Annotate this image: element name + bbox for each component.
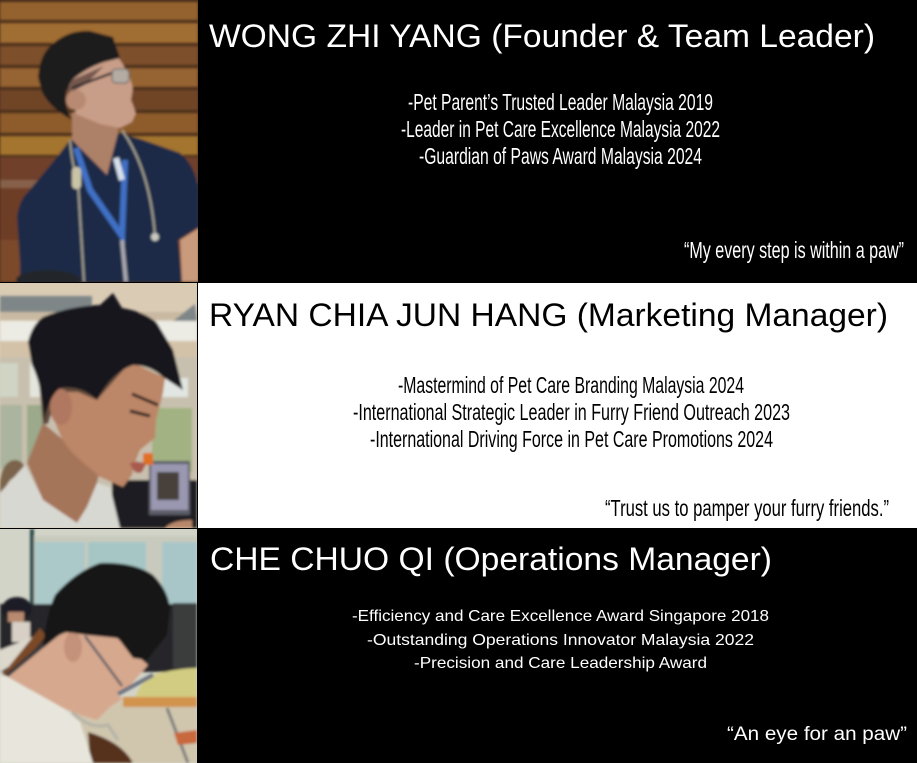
- shaved side: [67, 66, 104, 92]
- quote: “An eye for an paw”: [727, 724, 907, 745]
- chair strap: [2, 628, 46, 676]
- lanyard: [76, 148, 125, 236]
- lips: [130, 462, 146, 473]
- glasses: [85, 636, 122, 686]
- awards list: -Pet Parent’s Trusted Leader Malaysia 2019: [408, 89, 713, 115]
- awards list: -Outstanding Operations Innovator Malaysia 2022: [367, 632, 754, 649]
- shaved sides: [38, 368, 125, 424]
- photo: Che Chuo Qi: [0, 529, 197, 763]
- name heading: CHE CHUO QI (Operations Manager): [210, 541, 772, 577]
- yellow object on table: [135, 668, 197, 698]
- face: [50, 360, 165, 487]
- background person: [2, 597, 32, 621]
- awards list: -Guardian of Paws Award Malaysia 2024: [419, 143, 702, 169]
- photo: Ryan Chia Jun Hang: [0, 283, 197, 528]
- eye and brow: [130, 394, 158, 416]
- dark monitor: [173, 603, 197, 668]
- ear: [50, 389, 72, 425]
- awards list: -Efficiency and Care Excellence Award Singapore 2018: [352, 608, 769, 625]
- white cloth: [0, 636, 35, 672]
- awards list: [353, 372, 790, 452]
- shoulder: [4, 642, 44, 678]
- neck: [72, 112, 118, 175]
- name heading: WONG ZHI YANG (Founder & Team Leader): [209, 18, 875, 54]
- shirt: [0, 465, 120, 528]
- earphones: [70, 130, 155, 282]
- awards list: -Precision and Care Leadership Award: [414, 655, 707, 672]
- awards list: -Leader in Pet Care Excellence Malaysia 2022: [401, 116, 720, 142]
- neck: [27, 423, 100, 523]
- floor: [72, 700, 197, 763]
- hair: [28, 293, 183, 420]
- photo: Wong Zhi Yang: [0, 0, 199, 290]
- panel background: [198, 283, 917, 528]
- ear: [66, 90, 86, 110]
- shirt: [0, 675, 93, 763]
- panel background: [197, 528, 917, 763]
- person in front: [15, 270, 80, 282]
- panel: Ryan Chia Jun Hang: [0, 283, 917, 528]
- awards list: [352, 608, 769, 672]
- face: [68, 57, 136, 128]
- glasses: [72, 73, 112, 88]
- hair: [38, 31, 120, 120]
- panel: Wong Zhi Yang: [0, 0, 917, 290]
- neck and face: [8, 632, 148, 720]
- desk and monitor: [112, 480, 197, 528]
- table: [123, 697, 197, 707]
- panel: Che Chuo Qi: [0, 528, 917, 763]
- seated person in background: [0, 460, 25, 496]
- awards list: -Mastermind of Pet Care Branding Malaysia 2024: [398, 372, 744, 398]
- hair: [43, 563, 170, 660]
- chair and floor items: [72, 712, 118, 740]
- awards list: [401, 89, 720, 169]
- shirt: [17, 133, 199, 282]
- name heading: RYAN CHIA JUN HANG (Marketing Manager): [209, 297, 888, 333]
- panel background: [198, 0, 917, 283]
- ear: [64, 632, 82, 662]
